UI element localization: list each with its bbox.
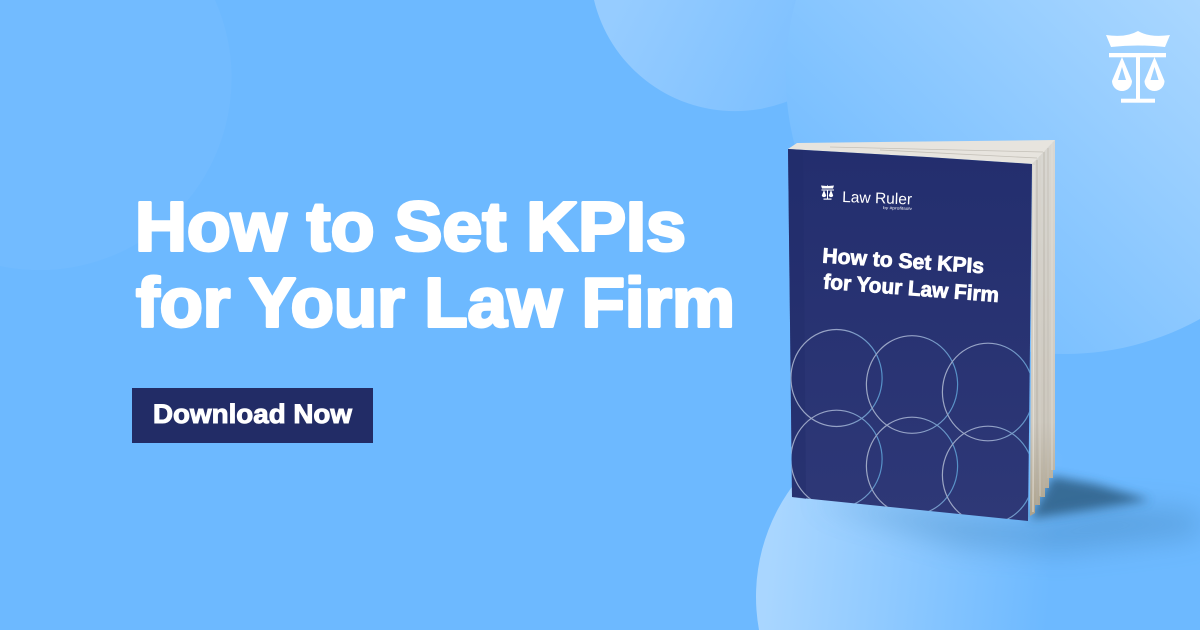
heading: How to Set KPIs [135, 188, 686, 266]
book cover [788, 149, 1032, 521]
cover title: How to Set KPIs [822, 245, 985, 278]
cover title: for Your Law Firm [823, 271, 1000, 307]
button: download now: Download Now [153, 399, 353, 429]
background circle: top right [786, 0, 1200, 354]
background circle: top left [0, 0, 232, 270]
soft shadow on the floor [810, 500, 1200, 552]
logo: crown and scales [1106, 31, 1170, 103]
cover title [822, 245, 1000, 307]
book shadow [1030, 476, 1150, 519]
cover circles [791, 330, 1034, 524]
book [788, 140, 1055, 524]
cover logo: Law Ruler [842, 189, 912, 208]
book spine crease [788, 149, 806, 499]
top edge page lines [830, 147, 1043, 158]
book top edge [788, 140, 1055, 164]
background circle: bottom [756, 411, 1128, 630]
cover logo: by #profitsolv [883, 205, 912, 211]
heading [135, 188, 735, 342]
page edge stripes [1033, 143, 1052, 512]
heading: for Your Law Firm [136, 264, 735, 342]
cover logo [821, 185, 912, 211]
background circle: top center [594, 0, 876, 111]
book page block [1030, 140, 1055, 516]
button: download now [132, 388, 373, 443]
